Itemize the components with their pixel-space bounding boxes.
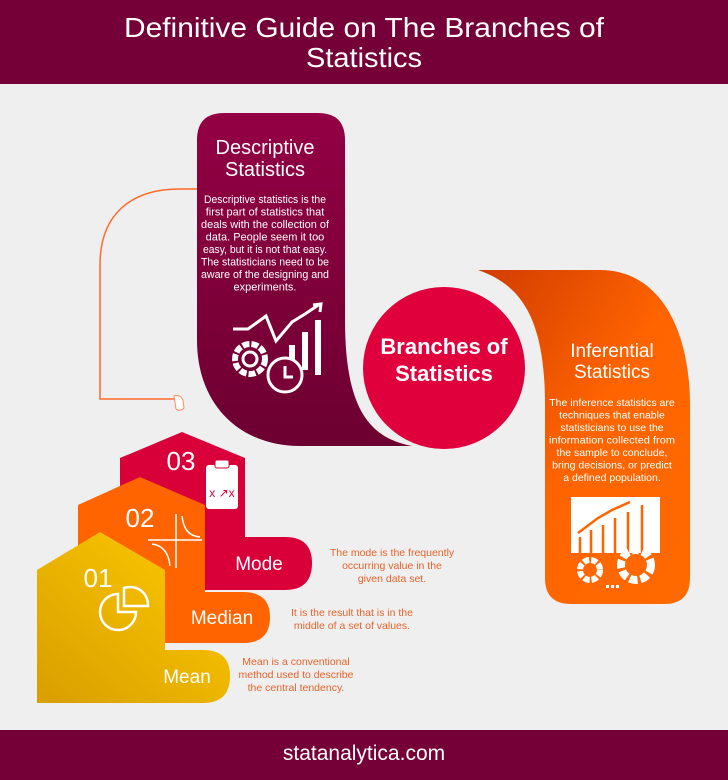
panel: inferential statistics: information collected from — [549, 434, 675, 446]
panel: inferential statistics: Inferential — [570, 341, 654, 362]
header — [0, 0, 728, 84]
description: median: It is the result that is in the — [291, 607, 413, 619]
circle: branches of statistics: Branches of — [380, 334, 508, 359]
panel: descriptive statistics: Statistics — [225, 159, 305, 181]
step 02: median — [78, 477, 270, 643]
description: mean: the central tendency. — [248, 682, 344, 694]
panel: descriptive statistics — [197, 113, 412, 446]
header: Definitive Guide on The Branches of — [124, 12, 604, 43]
panel: descriptive statistics: deals with the collection of — [201, 219, 330, 231]
panel: inferential statistics: a defined population. — [563, 472, 661, 484]
description: mean — [238, 656, 354, 694]
step 01: mean — [37, 532, 230, 703]
panel: descriptive statistics: The statisticians need to be — [201, 256, 329, 268]
step 01: mean: 01 — [84, 563, 112, 593]
panel: inferential statistics — [478, 270, 690, 604]
description: mode: given data set. — [358, 573, 426, 585]
step 02: median: Median — [191, 608, 253, 629]
description: mode — [330, 547, 455, 585]
step 03: mode — [120, 432, 312, 590]
panel: descriptive statistics: Descriptive — [216, 137, 314, 159]
icon: chart with gears and clock — [233, 304, 321, 392]
panel: inferential statistics: bring decisions, or predict — [552, 460, 672, 472]
panel: descriptive statistics: Descriptive statistics is the — [204, 194, 326, 206]
circle: branches of statistics — [360, 284, 528, 452]
icon: chart and gears — [571, 497, 660, 588]
panel: descriptive statistics: experiments. — [234, 282, 296, 294]
step 02: median: 02 — [126, 503, 154, 533]
step 03: mode: 03 — [167, 446, 195, 476]
panel: descriptive statistics: data. People seem it too — [206, 232, 324, 244]
panel: inferential statistics: Statistics — [574, 362, 650, 383]
description: median: middle of a set of values. — [294, 620, 410, 632]
header: Statistics — [306, 42, 422, 73]
description: mode: The mode is the frequently — [330, 547, 455, 559]
icon: axes — [148, 514, 202, 568]
step 01: mean: Mean — [163, 667, 211, 688]
step 03: mode: Mode — [235, 554, 283, 575]
panel: inferential statistics: techniques that enable — [559, 410, 665, 422]
icon: clipboard — [206, 460, 238, 509]
panel: inferential statistics: the sample to conclude, — [557, 447, 667, 459]
connector line — [100, 189, 198, 410]
panel: inferential statistics: The inference statistics are — [549, 397, 675, 409]
circle: branches of statistics: Statistics — [395, 361, 493, 386]
icon: pie chart — [100, 587, 148, 630]
panel: inferential statistics: statisticians to use the — [560, 422, 664, 434]
icon: clipboard: x ↗x — [209, 486, 235, 500]
panel: descriptive statistics: first part of statistics that — [206, 206, 324, 218]
description: mean: Mean is a conventional — [242, 656, 350, 668]
panel: descriptive statistics: easy, but it is not that easy. — [203, 244, 327, 256]
description: median — [291, 607, 413, 632]
panel: descriptive statistics: aware of the designing and — [201, 269, 329, 281]
description: mean: method used to describe — [238, 669, 354, 681]
footer: statanalytica.com — [283, 742, 445, 765]
footer — [0, 730, 728, 780]
description: mode: occurring value in the — [342, 560, 442, 572]
